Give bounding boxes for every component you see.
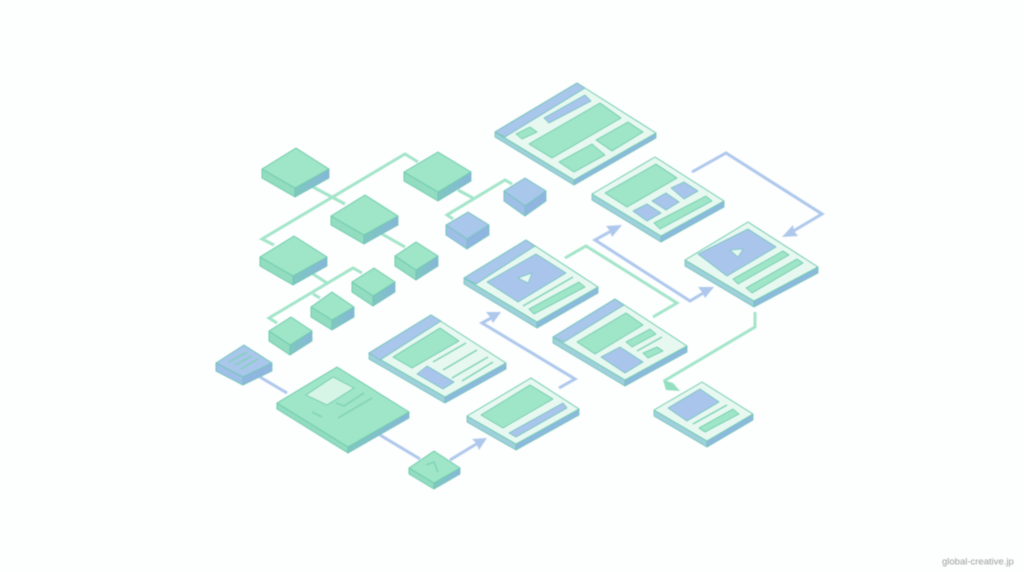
cube: blue node lower [446, 212, 489, 249]
watermark: global-creative.jp [942, 556, 1014, 568]
arrow: grid card to player card [692, 153, 822, 237]
cube: blue node upper [504, 178, 546, 216]
panel: top large layout card [495, 83, 656, 185]
box: green node left [260, 236, 327, 285]
icon: blue document tile [216, 345, 272, 385]
cube: small green node right [395, 242, 438, 280]
panel: image card with blue bar [467, 378, 579, 450]
arrow: blue double-headed link between grid card and player card [595, 225, 714, 301]
panel: content card with header [553, 299, 687, 386]
arrow: image card to video card [482, 312, 575, 388]
panel: video card with header [464, 240, 598, 328]
box: green node top centre [404, 152, 471, 201]
arrow: green link between video card and content card [565, 246, 677, 317]
icon: small green chevron tile [409, 451, 460, 489]
box: green node middle [331, 195, 398, 244]
arrow: small tile to image card [450, 438, 487, 460]
cube: small green node two [311, 292, 354, 330]
blue connector: document to main card [260, 377, 287, 393]
green connectors: hierarchy tree [262, 154, 512, 323]
panel: grid layout card [592, 157, 724, 242]
box: green node top left [262, 148, 329, 197]
panel: small card bottom right [654, 382, 753, 447]
panel: large green main card [277, 367, 409, 453]
panel: player card with video frame [685, 222, 818, 307]
blue connector: main card to small tile [380, 435, 420, 459]
cube: small green node three [269, 317, 312, 355]
cube: small green node one [352, 268, 395, 306]
arrow: player card to small card [663, 312, 755, 391]
panel: article card with text lines [369, 315, 506, 403]
